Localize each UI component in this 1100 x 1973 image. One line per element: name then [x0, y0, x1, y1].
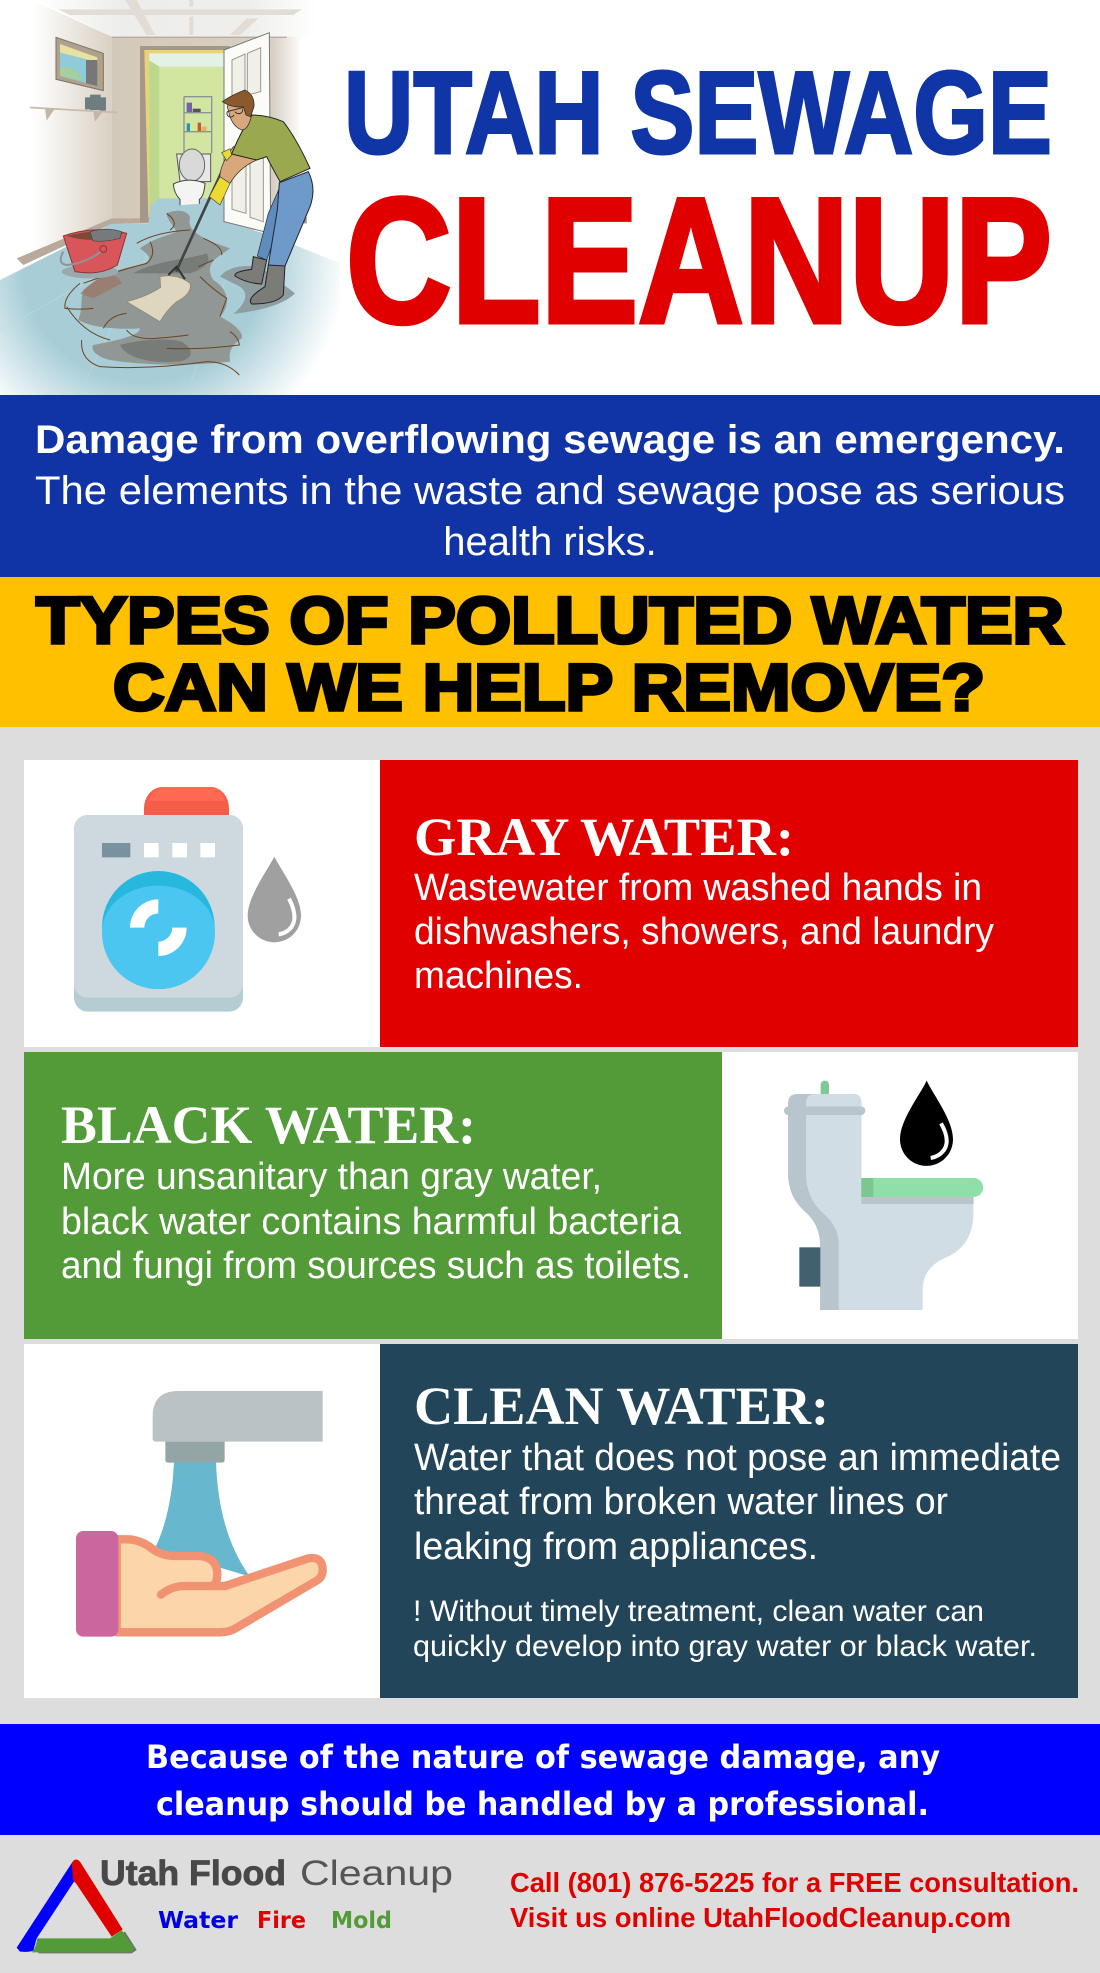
- clean water description: [414, 1437, 1061, 1568]
- sewage puddle: [78, 211, 242, 365]
- footer: [0, 1835, 1100, 1973]
- callout text: cleanup should be handled by a professional.: [156, 1785, 929, 1823]
- contact details: Call (801) 876-5225 for a FREE consultation.: [510, 1867, 1079, 1898]
- black water heading: BLACK WATER:: [61, 1095, 476, 1155]
- clean water heading: CLEAN WATER:: [414, 1376, 829, 1436]
- intro text: [35, 418, 1065, 564]
- contact details: Visit us online UtahFloodCleanup.com: [510, 1902, 1011, 1933]
- logo: Utah Flood Cleanup: [17, 1854, 453, 1953]
- intro text: health risks.: [443, 520, 657, 564]
- heading text: TYPES OF POLLUTED WATER: [36, 583, 1064, 657]
- contact details: [510, 1867, 1079, 1933]
- intro text: Damage from overflowing sewage is an emergency.: [35, 418, 1065, 462]
- panel: gray water: [24, 760, 1078, 1047]
- icon: toilet: [784, 1081, 983, 1310]
- illustration: man mopping sewage overflow: [0, 0, 340, 395]
- intro text: The elements in the waste and sewage pose as serious: [35, 469, 1065, 513]
- gray water description: Wastewater from washed hands in: [414, 867, 982, 909]
- sewage strands: [65, 213, 239, 375]
- black water description: More unsanitary than gray water,: [61, 1156, 602, 1198]
- heading band: [0, 577, 1100, 727]
- icon: gray water drop: [248, 857, 301, 942]
- logo tagline: [158, 1908, 392, 1934]
- logo tagline: Water: [158, 1908, 239, 1934]
- gray water description: dishwashers, showers, and laundry: [414, 911, 994, 953]
- logo triangle: [17, 1860, 137, 1953]
- clean water description: Water that does not pose an immediate: [414, 1437, 1061, 1479]
- doorway: [140, 46, 230, 223]
- bucket: [62, 265, 118, 278]
- icon: black water drop: [900, 1081, 953, 1166]
- logo name: [100, 1854, 453, 1893]
- bathroom shelf: [184, 97, 212, 153]
- intro band: [0, 395, 1100, 577]
- clean water description: leaking from appliances.: [414, 1526, 818, 1568]
- panel: clean water: [24, 1344, 1078, 1698]
- door: [224, 33, 271, 233]
- mop: [176, 159, 227, 272]
- callout text: Because of the nature of sewage damage, any: [146, 1738, 940, 1776]
- gray content panel: [0, 727, 1100, 1724]
- icon: washing machine: [74, 787, 243, 1012]
- heading text: [36, 583, 1064, 724]
- man: [235, 257, 267, 284]
- logo tagline: Mold: [331, 1908, 392, 1934]
- title: Utah Sewage Cleanup: [344, 47, 1052, 360]
- gray water description: [414, 867, 994, 997]
- black water description: black water contains harmful bacteria: [61, 1201, 682, 1243]
- clean water warning: quickly develop into gray water or black water.: [413, 1630, 1037, 1663]
- gray water description: machines.: [414, 955, 583, 997]
- toilet: [177, 154, 211, 182]
- black water description: and fungi from sources such as toilets.: [61, 1245, 691, 1287]
- heading text: CAN WE HELP REMOVE?: [113, 650, 985, 724]
- clean water warning: [413, 1595, 1037, 1663]
- callout text: [146, 1738, 940, 1823]
- clean water description: threat from broken water lines or: [414, 1481, 948, 1523]
- professional callout band: [0, 1724, 1100, 1835]
- clean water warning: ! Without timely treatment, clean water can: [413, 1595, 984, 1628]
- boots shadow: [220, 266, 295, 314]
- gray water heading: GRAY WATER:: [414, 807, 794, 867]
- window: [56, 37, 103, 91]
- logo name: Cleanup: [300, 1854, 453, 1893]
- panel: black water: [24, 1052, 1078, 1339]
- shelf: [30, 107, 117, 113]
- icon: faucet and hand: [76, 1391, 323, 1637]
- logo name: Utah Flood: [100, 1854, 286, 1893]
- logo tagline: Fire: [257, 1908, 306, 1934]
- black water description: [61, 1156, 691, 1287]
- floor: [0, 202, 340, 395]
